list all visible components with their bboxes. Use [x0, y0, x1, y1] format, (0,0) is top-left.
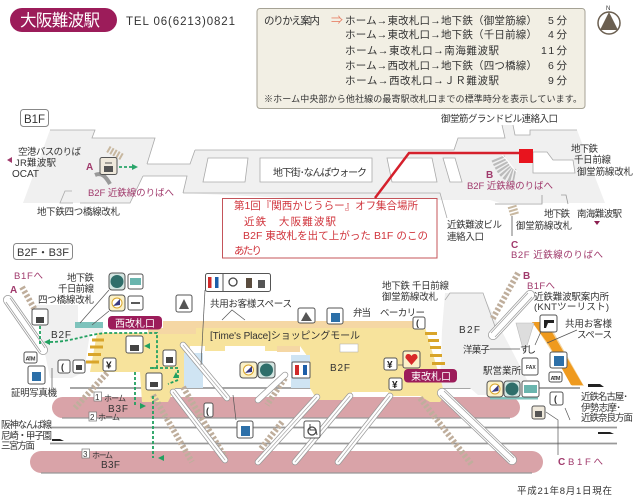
icon: heart: [403, 351, 420, 368]
B2F B3F label: [14, 244, 72, 260]
teal gate bar west: [75, 322, 103, 328]
label: underground mall: 地下街･なんばウォーク: [273, 166, 367, 179]
green arrow at A: [119, 166, 133, 168]
icon: phone platform: (: [206, 406, 209, 416]
rails: [50, 388, 617, 444]
label: B2F Kintetsu east: B2F 近鉄線のりばへ: [467, 180, 553, 192]
label: station office: 駅営業所: [483, 365, 521, 377]
icon: lounge: [298, 308, 315, 323]
platform 3: [30, 451, 543, 473]
platform labels: B3F: [101, 460, 120, 471]
icon: arrows west: [128, 296, 143, 310]
platform labels: 2: [90, 413, 95, 422]
callout: meetup location: あたり: [234, 245, 262, 257]
panel: transfer guide: 11分: [541, 45, 568, 57]
leader lines: [52, 290, 577, 455]
platform labels: 1: [95, 393, 100, 402]
label: B1F east: B1Fへ: [527, 281, 555, 292]
icon: phone west: [58, 360, 70, 373]
label: Midosuji Grand Building: 御堂筋グランドビル連絡入口: [441, 113, 558, 125]
panel: transfer guide: のりかえ案内: [264, 14, 320, 27]
B1F floor plan: [23, 125, 605, 218]
panel: transfer guide: 6分: [548, 60, 568, 72]
icon: ATM east: [549, 372, 562, 382]
label: sushi: すし: [520, 345, 536, 356]
B2F B3F label: B2F・B3F: [17, 247, 69, 259]
icon: yen gate: [389, 378, 402, 391]
label: B2F Kintetsu south: B2F 近鉄線のりばへ: [511, 249, 603, 261]
platform labels: ホーム: [98, 413, 120, 422]
panel: transfer guide: [257, 8, 585, 108]
platform labels: ホーム: [104, 394, 126, 403]
label: B2F Kintetsu west: B2F 近鉄線のりばへ: [88, 187, 174, 199]
label: Midosuji gate B2F: 御堂筋線改札: [382, 291, 438, 303]
icon: elevator platform: [146, 373, 162, 390]
icon: ATM west: ATM: [26, 356, 36, 362]
icon: phone platform: [204, 403, 213, 417]
panel: transfer guide: ホーム→東改札口→地下鉄（千日前線）: [345, 28, 537, 41]
label: B: B: [486, 170, 493, 181]
icon: phone east: (: [554, 394, 557, 404]
label: confectionery: 洋菓子: [463, 344, 490, 356]
gold stairs east: [425, 332, 445, 365]
arrowhead: [132, 164, 138, 170]
B1F label: B1F: [24, 114, 45, 126]
label: Sannomiya: 三宮方面: [1, 440, 35, 452]
icon: yen west: [103, 358, 116, 372]
label: Yotsubashi west: 四つ橋線改札: [38, 294, 94, 306]
panel: transfer guide: ホーム→西改札口→ＪＲ難波駅: [345, 74, 500, 87]
icon: train top: [588, 384, 604, 387]
label: shared space east: 共用お客様: [565, 318, 612, 330]
west gate pill: [108, 316, 162, 330]
icon: bag east: [550, 352, 567, 368]
label: Midosuji gate: 御堂筋線改札: [577, 166, 633, 178]
label: airport bus: 空港バスのりば: [18, 146, 81, 158]
label: shared space: 共用お客様スペース: [210, 298, 292, 310]
panel: transfer guide: ホーム→東改札口→地下鉄（御堂筋線）: [345, 14, 537, 27]
red pointer line: [375, 153, 522, 198]
icon: subway circle west: [109, 273, 125, 290]
icon: north compass: [598, 6, 620, 34]
label: subway west: 地下鉄: [67, 272, 94, 284]
icon: fax: FAX: [526, 365, 536, 371]
platform labels: 3: [83, 450, 88, 459]
platform 1: [52, 397, 520, 418]
label: C lower: C: [558, 457, 565, 468]
panel: transfer guide: ホーム→東改札口→南海難波駅: [345, 44, 500, 57]
label: Hanshin line: 阪神なんば線: [1, 419, 52, 431]
label: bento: 弁当: [353, 307, 371, 319]
icon: compass badge centre: [240, 362, 257, 378]
icon: ticket east: [540, 315, 557, 332]
icon: bag north: [327, 308, 343, 324]
icon: yen centre: ¥: [387, 360, 393, 371]
label: bakery: ベーカリー: [380, 308, 425, 319]
icon: compass badge west: [109, 295, 125, 311]
label: A: A: [86, 162, 93, 173]
icon: fax: [522, 358, 538, 375]
icon: elevator gate west: [126, 336, 143, 353]
label: Nara: 近鉄奈良方面: [581, 412, 633, 424]
callout: meetup location: 近鉄 大阪難波駅: [244, 215, 336, 228]
callout: meetup location: 第1回『関西かじうらー』オフ集合場所: [234, 199, 418, 212]
label: B1F upper left: B1Fへ: [14, 271, 43, 282]
icon: ATM west: [24, 352, 37, 363]
orange concourse east: [532, 322, 584, 386]
platform 3 edge: [41, 472, 532, 474]
panel: transfer guide: 4分: [548, 29, 568, 41]
icon: elevator east: [532, 406, 545, 419]
label: Amagasaki: 尼崎・甲子園: [1, 430, 52, 442]
B2F floor: concourse: [90, 327, 445, 402]
B1F label: [20, 110, 48, 126]
icon: ATM east: ATM: [550, 376, 561, 382]
light blue toilet areas: [184, 353, 310, 388]
B2F floor: west gray: [35, 305, 103, 378]
label: OCAT: OCAT: [12, 169, 39, 180]
platform labels: B3F: [108, 404, 128, 415]
label: Time's Place: [Time's Place]ショッピングモール: [210, 329, 360, 342]
icon: subway circle centre: [258, 362, 275, 378]
icon: subway circle east: [504, 381, 520, 397]
label: B east: B: [523, 271, 530, 282]
green arrowheads: [44, 339, 179, 461]
B2F floor: east gray: [440, 293, 535, 395]
icon: elevator north: [176, 295, 192, 312]
east gate pill: 東改札口: [411, 370, 451, 383]
stairs and line at C: [512, 206, 515, 236]
east floor outline: [445, 293, 497, 332]
icon: wheelchair: [304, 421, 320, 438]
panel: transfer guide: ホーム→西改札口→地下鉄（四つ橋線）: [345, 59, 537, 72]
platform labels: [82, 392, 128, 471]
label: B2F west: B2F: [51, 330, 71, 341]
stairs: [22, 273, 518, 465]
label: Yotsubashi gate: 地下鉄四つ橋線改札: [37, 206, 120, 218]
label: Nankai: 南海難波駅: [577, 208, 622, 220]
label: subway south: 地下鉄: [544, 208, 570, 220]
panel: transfer guide: ⇒: [331, 13, 343, 27]
title pill: [10, 8, 117, 32]
label: B2F east: B2F: [459, 325, 480, 336]
label: Sennichimae: 千日前線: [574, 154, 611, 166]
label: Midosuji gate south: 御堂筋線改札: [516, 220, 572, 232]
icon: restrooms and accessibility: [206, 274, 270, 292]
label: B2F centre: B2F: [330, 363, 350, 374]
icon: bag platform: [237, 421, 253, 438]
platform labels: ホーム: [92, 451, 113, 460]
label: date: 平成21年8月1日現在: [517, 485, 612, 497]
icon: yen gate: ¥: [392, 380, 398, 391]
shop band: [148, 321, 425, 352]
icon: phone north: [413, 317, 425, 329]
callout: meetup location: B2F 東改札を出て上がった B1F のこの: [243, 229, 428, 242]
escalators wide: [6, 293, 532, 462]
icon: north compass: N: [606, 6, 610, 12]
title pill: 大阪難波駅: [20, 11, 100, 30]
icon: restroom centre: [292, 362, 310, 378]
label: to Nagoya: 近鉄名古屋･: [581, 391, 628, 403]
icon: bag west: [28, 366, 45, 384]
label: KNT tourist: (KNTツーリスト): [534, 302, 609, 313]
platform 1 edge: [62, 417, 510, 419]
stairs at B: [498, 155, 517, 176]
icon: train bottom: [598, 432, 614, 434]
label: Sennichimae west: 千日前線: [58, 283, 94, 295]
icon: elevator small: [73, 360, 85, 373]
icon: phone east: [550, 392, 563, 405]
icon: yen centre: [384, 358, 397, 371]
stairs and elevator at A: [95, 149, 122, 184]
icon: yen west: ¥: [106, 360, 112, 372]
icon: ticket teal east: [522, 381, 539, 397]
label: Ise-Shima: 伊勢志摩･: [581, 402, 621, 414]
red marker square: [519, 149, 533, 163]
label: subway Sennichimae: 地下鉄 千日前線: [382, 280, 449, 292]
label: Kintetsu Namba Building: 近鉄難波ビル: [447, 219, 502, 231]
icon: phone north: (: [416, 318, 419, 328]
teal gate bar east: [490, 397, 538, 400]
icon: ticket teal west: [128, 274, 143, 289]
escalators narrow: [173, 345, 390, 462]
label: A lower: A: [10, 285, 17, 296]
label: photo booth: 証明写真機: [11, 387, 57, 399]
callout: meetup location: [222, 198, 437, 258]
icon: train west: [52, 439, 64, 441]
west gate pill: 西改札口: [115, 317, 155, 330]
icon: compass badge east: [487, 381, 503, 397]
label: Kintetsu info: 近鉄難波駅案内所: [534, 291, 609, 303]
icon: phone west: (: [61, 362, 64, 372]
label: C: C: [511, 240, 518, 251]
arrow to Nankai: [594, 221, 600, 225]
telephone number: TEL 06(6213)0821: [126, 16, 235, 28]
label: connecting entrance: 連絡入口: [447, 231, 484, 243]
panel: transfer guide: ※ホーム中央部から他社線の最寄駅改札口までの標準時分を表示しています。: [264, 93, 582, 104]
icon: elevator west: [32, 309, 48, 325]
east gate pill: [404, 369, 457, 383]
panel: transfer guide: 5分: [548, 15, 568, 27]
label: JR Namba: JR難波駅: [15, 157, 56, 169]
label: space: スペース: [577, 330, 612, 341]
icon: escalator funnel: [516, 323, 534, 349]
green route west: [40, 326, 178, 458]
label: B1F lower right: B1Fへ: [568, 457, 603, 468]
label: subway east: 地下鉄: [571, 143, 598, 155]
panel: transfer guide: 9分: [548, 75, 568, 87]
gold stairs west: [86, 338, 104, 364]
arrow to JR: [7, 157, 12, 163]
icon: elevator concourse: [163, 350, 176, 366]
